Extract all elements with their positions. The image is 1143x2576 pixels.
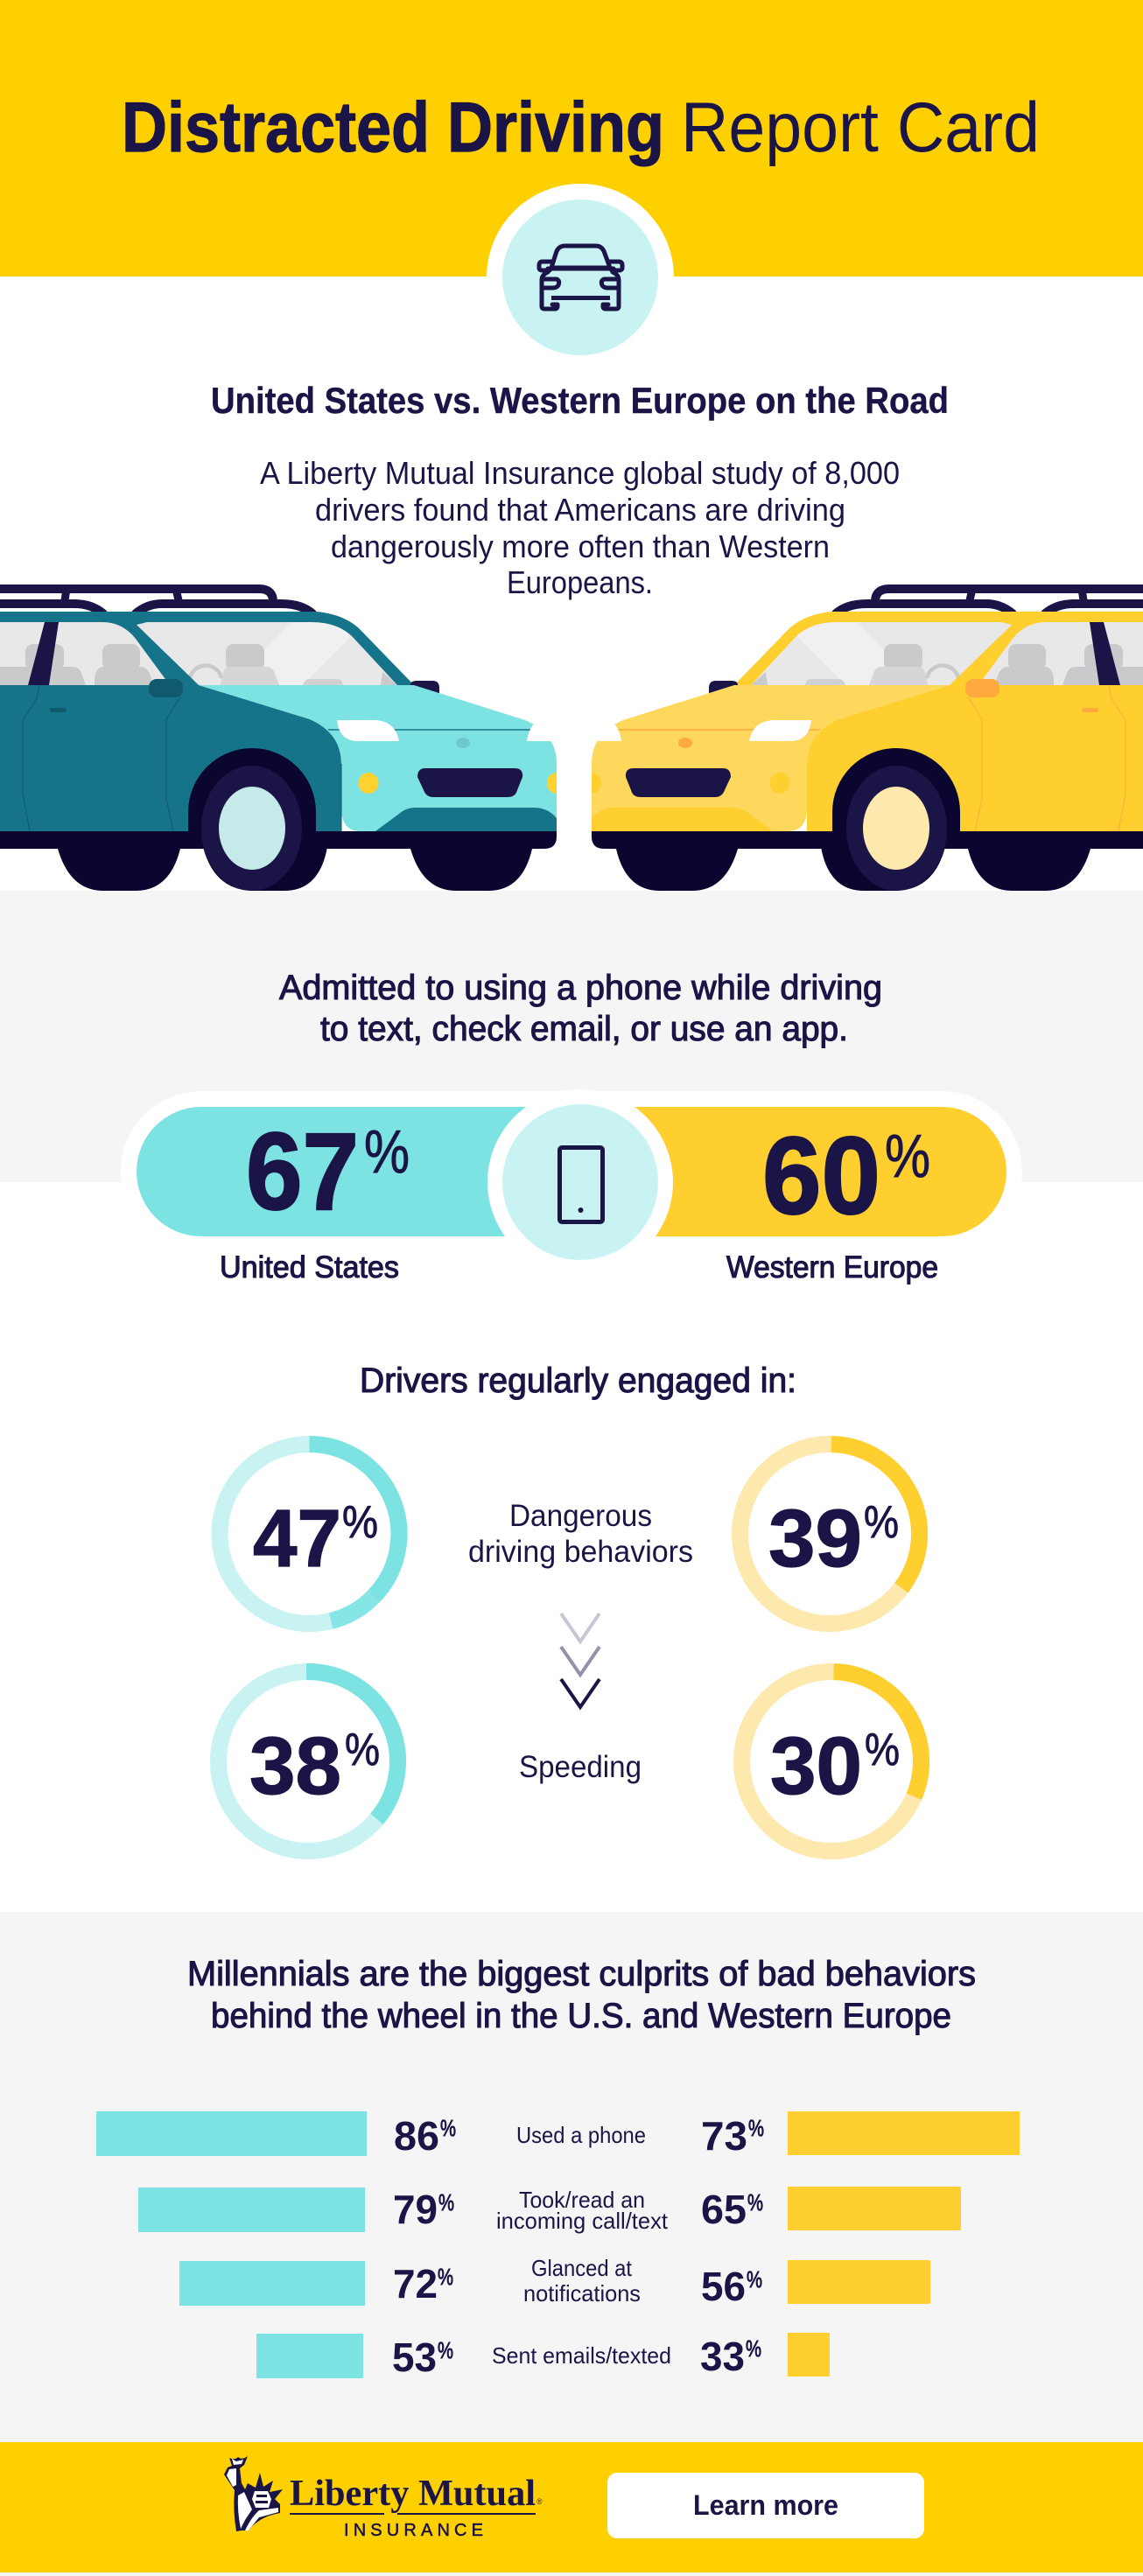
intro paragraph: Europeans. xyxy=(507,564,653,600)
bar row: glanced at notifications: % xyxy=(747,2266,762,2292)
pill: United States xyxy=(137,1107,609,1236)
heading: drivers engaged: Drivers regularly engaged in: xyxy=(360,1362,796,1400)
donut: 38% xyxy=(219,1671,398,1852)
donut: 30% xyxy=(742,1671,922,1852)
logo: wordmark: INSURANCE xyxy=(344,2521,483,2540)
logo: wordmark: ® xyxy=(536,2497,543,2506)
icon: car in circle xyxy=(487,184,674,371)
bar row: sent emails/texted xyxy=(256,2333,830,2380)
donut: 47% xyxy=(220,1444,399,1624)
pill: United States: % xyxy=(364,1117,410,1186)
title: Report Card xyxy=(681,88,1040,167)
bar row: used a phone xyxy=(96,2111,1020,2159)
logo: Liberty Mutual statue xyxy=(224,2456,283,2531)
bar row: glanced at notifications xyxy=(179,2255,930,2309)
bar row: used a phone: % xyxy=(440,2115,456,2141)
intro paragraph: A Liberty Mutual Insurance global study of 8,000 xyxy=(260,455,900,491)
donut: 38%: 38 xyxy=(249,1720,341,1811)
bar row: used a phone: % xyxy=(748,2115,764,2141)
bar row: glanced at notifications: % xyxy=(438,2264,453,2290)
bar row: took/read call: 65 xyxy=(701,2187,747,2232)
arrow: chevrons down xyxy=(561,1614,600,1707)
label: dangerous driving: Dangerous xyxy=(509,1499,652,1533)
logo: wordmark: Liberty Mutual xyxy=(290,2474,536,2514)
bar row: glanced at notifications: 56 xyxy=(701,2264,746,2309)
bar row: glanced at notifications: notifications xyxy=(523,2280,641,2306)
heading: phone use xyxy=(279,969,882,1048)
donut: 39% xyxy=(740,1444,920,1624)
button: learn more xyxy=(607,2473,924,2538)
footer xyxy=(0,2442,1143,2576)
bar row: took/read call: % xyxy=(438,2189,454,2216)
bar row: used a phone: 86 xyxy=(394,2113,439,2159)
donut: 39%: % xyxy=(864,1497,899,1548)
header banner xyxy=(0,0,1143,276)
icon: phone in circle xyxy=(487,1089,673,1275)
title: Distracted Driving xyxy=(122,88,664,167)
panel: millennials xyxy=(0,1912,1143,2442)
intro paragraph: drivers found that Americans are driving xyxy=(315,492,845,528)
pill: United States: 67 xyxy=(246,1111,359,1233)
car: teal, United States xyxy=(0,589,557,891)
bar row: used a phone: 73 xyxy=(701,2113,747,2159)
bar row: took/read call: % xyxy=(747,2189,763,2216)
bar row: sent emails/texted: 33 xyxy=(700,2334,745,2379)
bar row: sent emails/texted: 53 xyxy=(392,2334,437,2380)
label: Western Europe: Western Europe xyxy=(726,1250,938,1284)
donut: 30%: 30 xyxy=(770,1720,862,1811)
heading: millennials: Millennials are the biggest culprits of bad behaviors xyxy=(187,1955,976,1993)
pill: Western Europe xyxy=(560,1107,1006,1237)
donut: 47%: 47 xyxy=(253,1493,341,1584)
pill: Western Europe: % xyxy=(885,1122,930,1190)
label: dangerous driving: driving behaviors xyxy=(468,1535,693,1569)
label: dangerous driving xyxy=(468,1499,693,1569)
panel: phone use xyxy=(0,891,1143,1275)
heading: phone use: Admitted to using a phone while driving xyxy=(279,969,882,1007)
bar row: sent emails/texted: Sent emails/texted xyxy=(492,2342,671,2369)
label: speeding: Speeding xyxy=(519,1750,642,1784)
bar row: used a phone: Used a phone xyxy=(516,2122,646,2148)
heading: millennials: behind the wheel in the U.S. and Western Europe xyxy=(211,1997,951,2035)
heading: millennials xyxy=(187,1955,976,2035)
donut: 47%: % xyxy=(342,1497,378,1548)
donut: 30%: % xyxy=(865,1725,900,1775)
bar row: glanced at notifications: Glanced at xyxy=(531,2255,633,2281)
logo: wordmark xyxy=(290,2474,543,2540)
intro paragraph xyxy=(260,455,900,600)
bar row: took/read call: incoming call/text xyxy=(496,2208,669,2234)
bar row: sent emails/texted: % xyxy=(438,2337,453,2363)
bar row: took/read call: Took/read an xyxy=(519,2187,645,2213)
donut: 39%: 39 xyxy=(768,1493,862,1584)
bar row: took/read call xyxy=(138,2187,961,2234)
button: learn more: Learn more xyxy=(693,2489,838,2521)
bar row: glanced at notifications: 72 xyxy=(393,2261,438,2306)
subtitle: United States vs. Western Europe on the Road xyxy=(211,380,949,421)
bar row: sent emails/texted: % xyxy=(746,2335,761,2362)
donut: 38%: % xyxy=(345,1725,380,1775)
label: United States: United States xyxy=(220,1250,399,1284)
bar row: took/read call: 79 xyxy=(393,2187,438,2232)
pill: Western Europe: 60 xyxy=(762,1116,880,1237)
intro paragraph: dangerously more often than Western xyxy=(331,528,830,564)
car: yellow, Western Europe xyxy=(592,589,1143,891)
heading: phone use: to text, check email, or use an app. xyxy=(320,1010,848,1048)
